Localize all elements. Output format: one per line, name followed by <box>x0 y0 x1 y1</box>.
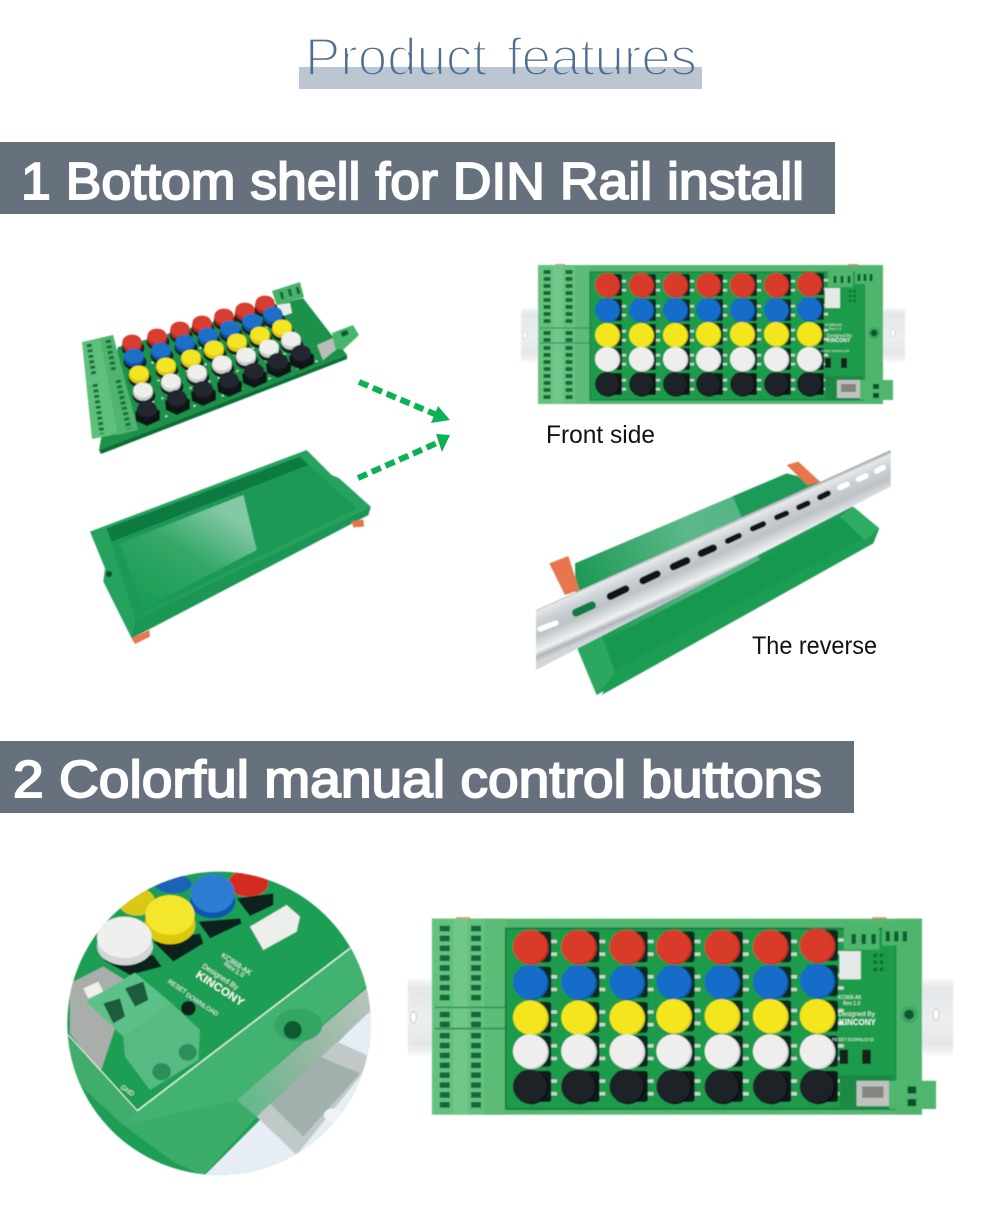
tray back panel <box>575 473 879 695</box>
title word overlap on band: Product <box>305 28 487 87</box>
tray front wall shade <box>132 507 371 638</box>
circular close-up photo <box>60 860 380 1180</box>
product photo: empty DIN rail tray <box>90 450 371 644</box>
white button <box>97 917 162 975</box>
background behind rail <box>205 1011 372 1176</box>
green power terminal <box>86 973 200 1090</box>
left enclosure strip <box>67 1035 137 1125</box>
product photo: assembled board, perspective <box>82 282 359 454</box>
arrow: top board to assembled <box>359 382 450 423</box>
enclosure top face <box>123 948 370 1125</box>
title <box>299 38 702 89</box>
yellow button <box>145 895 203 962</box>
board silkscreen text: KC868-AK <box>220 951 254 977</box>
tray body <box>90 450 371 638</box>
heading banner 2: 2 Colorful manual control buttons <box>13 751 822 809</box>
board silkscreen text: RESET <box>166 978 188 996</box>
circuit board <box>99 298 347 450</box>
caption: front side: Front side <box>546 421 655 449</box>
board silkscreen text: KINCONY <box>827 338 851 344</box>
board silkscreen text: KINCONY <box>839 1018 877 1027</box>
board silkscreen text: Designed By <box>201 961 241 992</box>
black buttons row <box>135 345 314 426</box>
power terminal block <box>332 325 359 350</box>
caption: the reverse: The reverse <box>752 632 877 660</box>
mounting hole <box>106 571 112 577</box>
title word overlap on band <box>310 67 694 74</box>
board silkscreen text <box>832 995 877 1042</box>
board silkscreen text: Rev:1.0 <box>843 1001 860 1007</box>
top terminal block <box>272 282 304 306</box>
left terminal blocks <box>82 335 138 439</box>
board silkscreen text: DOWNLOAD <box>184 992 220 1018</box>
DIN rail close-up <box>257 1040 370 1155</box>
tray end block right <box>840 507 879 540</box>
board silkscreen text: Designed By <box>838 1011 876 1018</box>
white buttons row <box>132 332 304 404</box>
back buttons <box>118 870 273 916</box>
title band <box>299 67 702 89</box>
board silkscreen text: KC868-AK <box>825 323 843 327</box>
heading banner 1: 1 Bottom shell for DIN Rail install <box>21 153 804 211</box>
tray floor <box>107 457 357 618</box>
orange clip top <box>787 462 820 485</box>
board silkscreen text: Rev:1.0 <box>222 961 246 979</box>
orange clip bottom <box>132 630 150 644</box>
mounting hole <box>274 1008 322 1042</box>
white connector <box>277 303 292 317</box>
enclosure side <box>236 988 371 1117</box>
orange clip right <box>352 519 364 527</box>
white JST connector <box>250 905 300 950</box>
yellow buttons row <box>128 320 294 388</box>
board silkscreen text: Designed By <box>827 333 853 338</box>
product photo: reverse on DIN rail <box>536 450 891 695</box>
board silkscreen text: KC868-AK <box>838 995 862 1001</box>
DIN rail <box>536 450 891 670</box>
title word: Product: Product <box>305 28 487 87</box>
board silkscreen text <box>119 951 254 1098</box>
blue button <box>190 874 242 938</box>
title word: features: features <box>507 28 697 87</box>
product photo: front view with buttons <box>408 917 953 1115</box>
board silkscreen text: Rev:1.0 <box>829 327 841 331</box>
title word overlap on band: features <box>507 28 697 87</box>
board silkscreen text: GND <box>119 1084 135 1098</box>
tray end block left <box>577 635 615 695</box>
board silkscreen text <box>821 323 853 353</box>
product photo: front side on DIN rail <box>521 264 905 404</box>
arrow: tray to assembled <box>358 434 450 478</box>
board silkscreen text: RESET DOWNLOAD <box>821 349 850 353</box>
USB port <box>317 338 338 360</box>
tray outer wall <box>602 528 879 695</box>
tray floor <box>605 518 863 670</box>
board silkscreen text: KINCONY <box>193 969 246 1009</box>
blue buttons row <box>124 307 286 370</box>
orange clip left <box>549 556 579 595</box>
board silkscreen text: RESET DOWNLOAD <box>832 1037 874 1042</box>
USB metal housing <box>70 967 130 1073</box>
tactile switch <box>181 1001 196 1016</box>
red buttons row <box>122 296 278 356</box>
